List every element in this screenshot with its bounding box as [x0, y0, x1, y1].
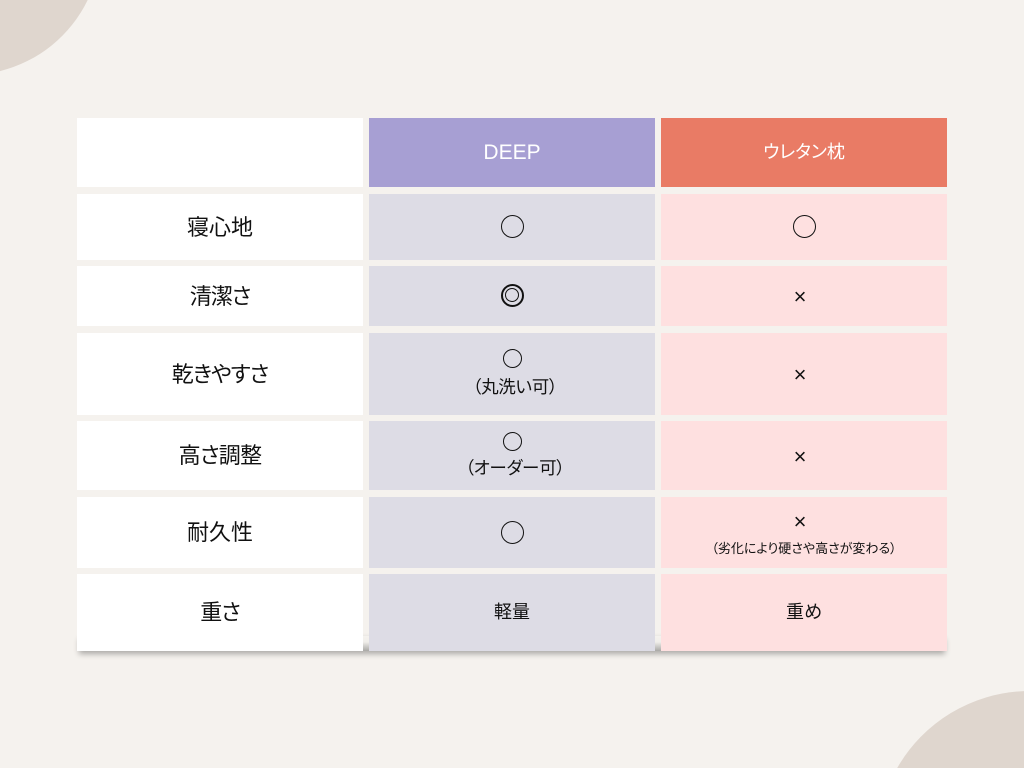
urethane drying: cross: ×: [794, 362, 806, 387]
urethane drying: cross: [661, 333, 947, 415]
row label: cleanliness: 清潔さ: [190, 284, 250, 308]
DEEP height: circle, made to order: [369, 421, 655, 490]
DEEP drying: circle, washable: （丸洗い可）: [473, 377, 557, 397]
DEEP sleep comfort: circle: [369, 194, 655, 260]
urethane durability: cross with note: （劣化により硬さや高さが変わる）: [711, 541, 897, 556]
decorative circle: top left: [0, 0, 88, 71]
DEEP cleanliness: double circle: [369, 266, 655, 326]
row label: ease of drying: [77, 333, 363, 415]
table shadow: [79, 636, 945, 651]
row label: cleanliness: [77, 266, 363, 326]
urethane durability: cross with note: [661, 497, 947, 568]
DEEP height: circle, made to order: （オーダー可）: [465, 458, 565, 478]
DEEP weight: light: 軽量: [494, 602, 530, 622]
row label: height adjustment: [77, 421, 363, 490]
row label: durability: [77, 497, 363, 568]
urethane cleanliness: cross: ×: [794, 284, 806, 309]
header: blank cell: [77, 118, 363, 187]
row label: sleep comfort: [77, 194, 363, 260]
urethane weight: heavy: [661, 574, 947, 651]
decorative circle: bottom right: [897, 691, 1024, 768]
row label: ease of drying: 乾きやすさ: [172, 362, 268, 386]
urethane durability: cross with note: ×: [794, 509, 806, 534]
urethane height: cross: ×: [794, 444, 806, 468]
row label: weight: 重さ: [200, 600, 240, 625]
header: DEEP: DEEP: [483, 140, 541, 164]
row label: durability: 耐久性: [187, 520, 253, 545]
DEEP durability: circle: [369, 497, 655, 568]
urethane height: cross: [661, 421, 947, 490]
row label: height adjustment: 高さ調整: [179, 443, 261, 468]
header: DEEP: [369, 118, 655, 187]
urethane sleep comfort: circle: [661, 194, 947, 260]
header: urethane pillow: ウレタン枕: [763, 142, 845, 162]
header: urethane pillow: [661, 118, 947, 187]
DEEP weight: light: [369, 574, 655, 651]
row label: weight: [77, 574, 363, 651]
row label: sleep comfort: 寝心地: [187, 214, 253, 240]
DEEP drying: circle, washable: [369, 333, 655, 415]
urethane cleanliness: cross: [661, 266, 947, 326]
urethane weight: heavy: 重め: [786, 602, 822, 622]
